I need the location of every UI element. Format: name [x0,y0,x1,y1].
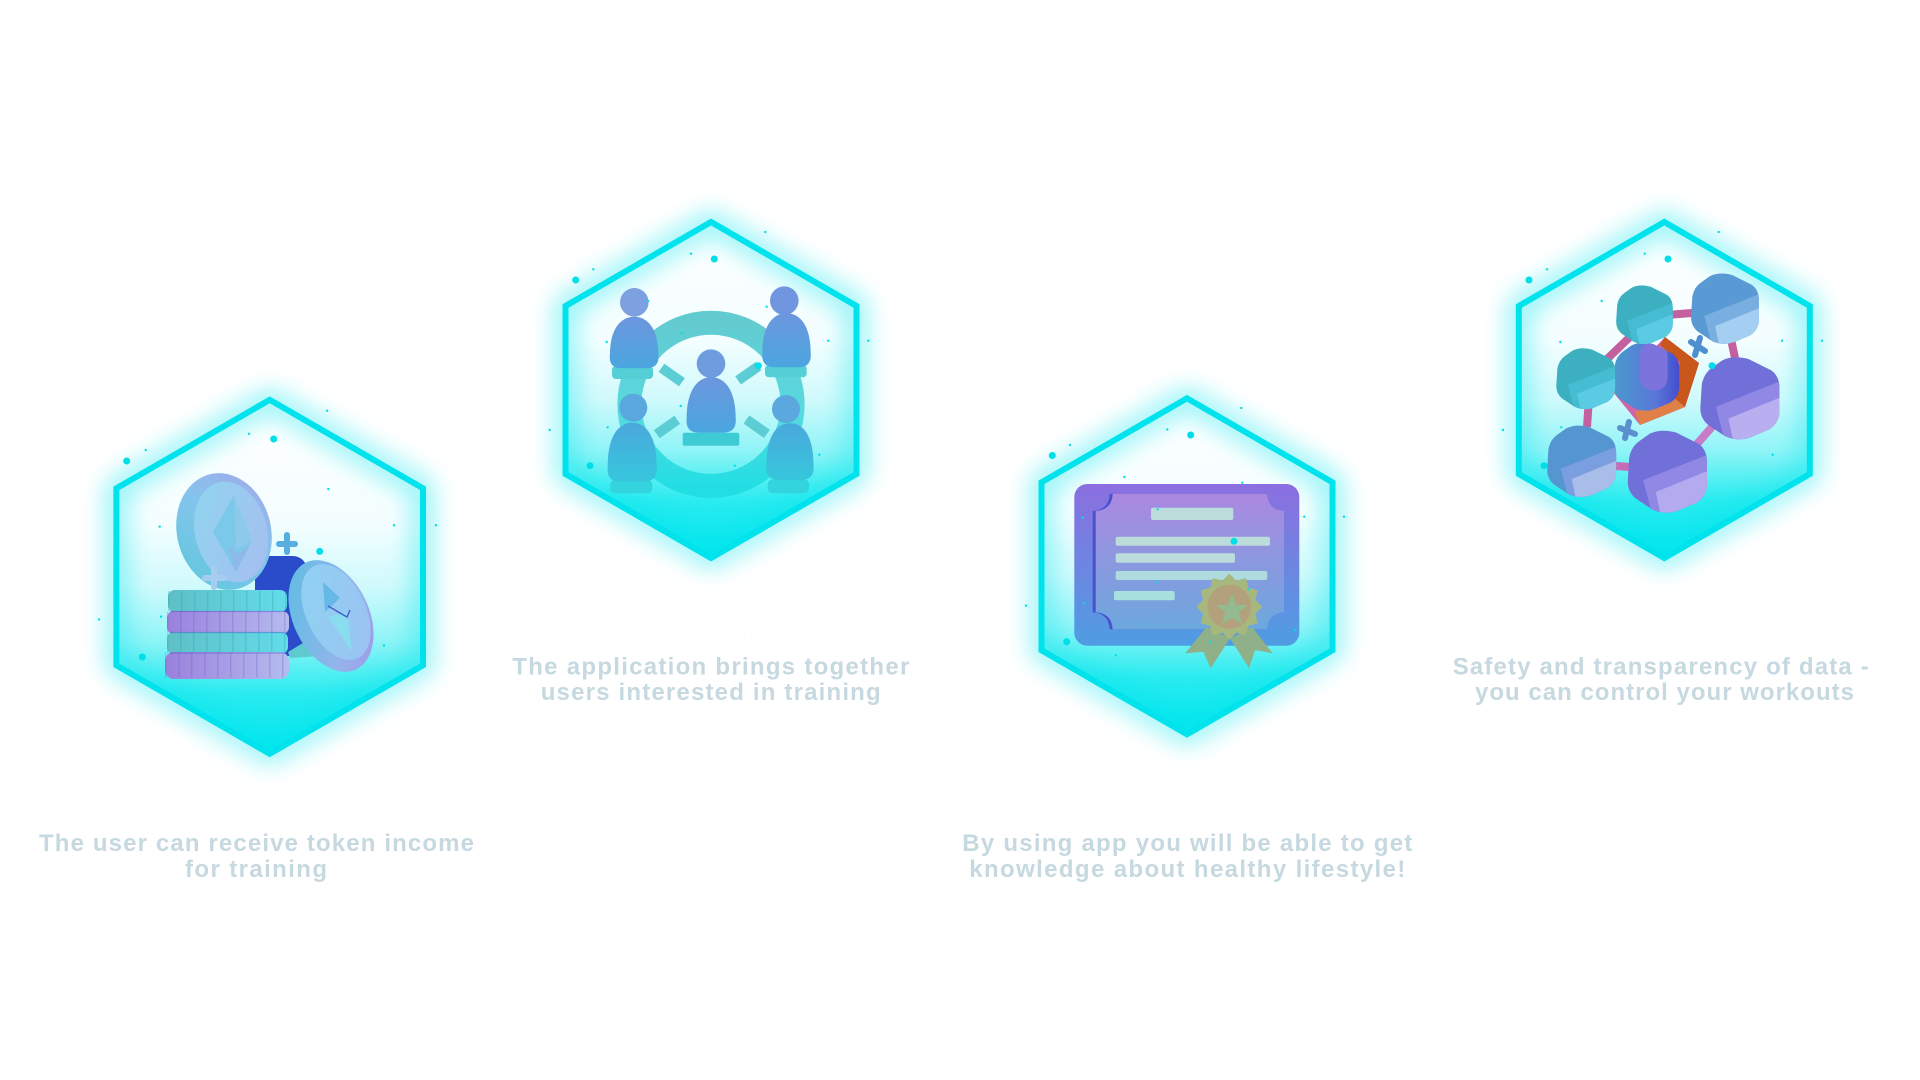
centre hexagon block [1606,336,1699,425]
description: token reward [39,830,474,883]
particles: blockchain technology [1502,231,1823,469]
description: token reward: The user can receive token income [39,830,474,857]
heading: education: EDUCATION [1102,782,1278,823]
description: education: By using app you will be able to get [962,830,1412,857]
hexagon frame: education [1042,398,1332,734]
hexagon frame: blockchain technology [1519,222,1810,558]
panel: token reward [39,400,474,883]
description: gym community [512,654,909,706]
hexagon frame: gym community [566,222,856,558]
icon: award seal [1185,574,1273,668]
description: education [962,830,1412,883]
heading: token reward: TOKEN REWARD [135,782,383,823]
plus accents [1620,338,1705,438]
description: education: knowledge about healthy lifestyle! [969,856,1405,883]
heading: blockchain technology: BLOCKCHAIN TECHNOLOGY [1452,607,1877,648]
description: blockchain technology: Safety and transparency of data - [1453,654,1869,680]
icon: certificate [1074,484,1299,668]
icon: ethereum coins [164,463,390,686]
description: blockchain technology: you can control your workouts [1475,679,1854,706]
description: gym community: users interested in training [541,679,881,706]
particles: token reward [98,410,437,660]
panel: education [962,398,1412,883]
panel: gym community [512,222,909,706]
description: token reward: for training [185,856,327,883]
heading: gym community: GYM COMMUNITY [570,607,852,648]
dumbbell weights [1547,274,1780,513]
dumbbell bars [1587,313,1735,467]
icon: dumbbell chain [1547,274,1780,513]
particles: gym community [548,231,870,469]
hexagon frame: token reward [116,400,423,754]
description: gym community: The application brings together [512,654,909,680]
panel: blockchain technology [1452,222,1877,706]
icon: community of people [608,286,814,493]
particles: education [1025,407,1345,656]
description: blockchain technology [1453,654,1869,706]
